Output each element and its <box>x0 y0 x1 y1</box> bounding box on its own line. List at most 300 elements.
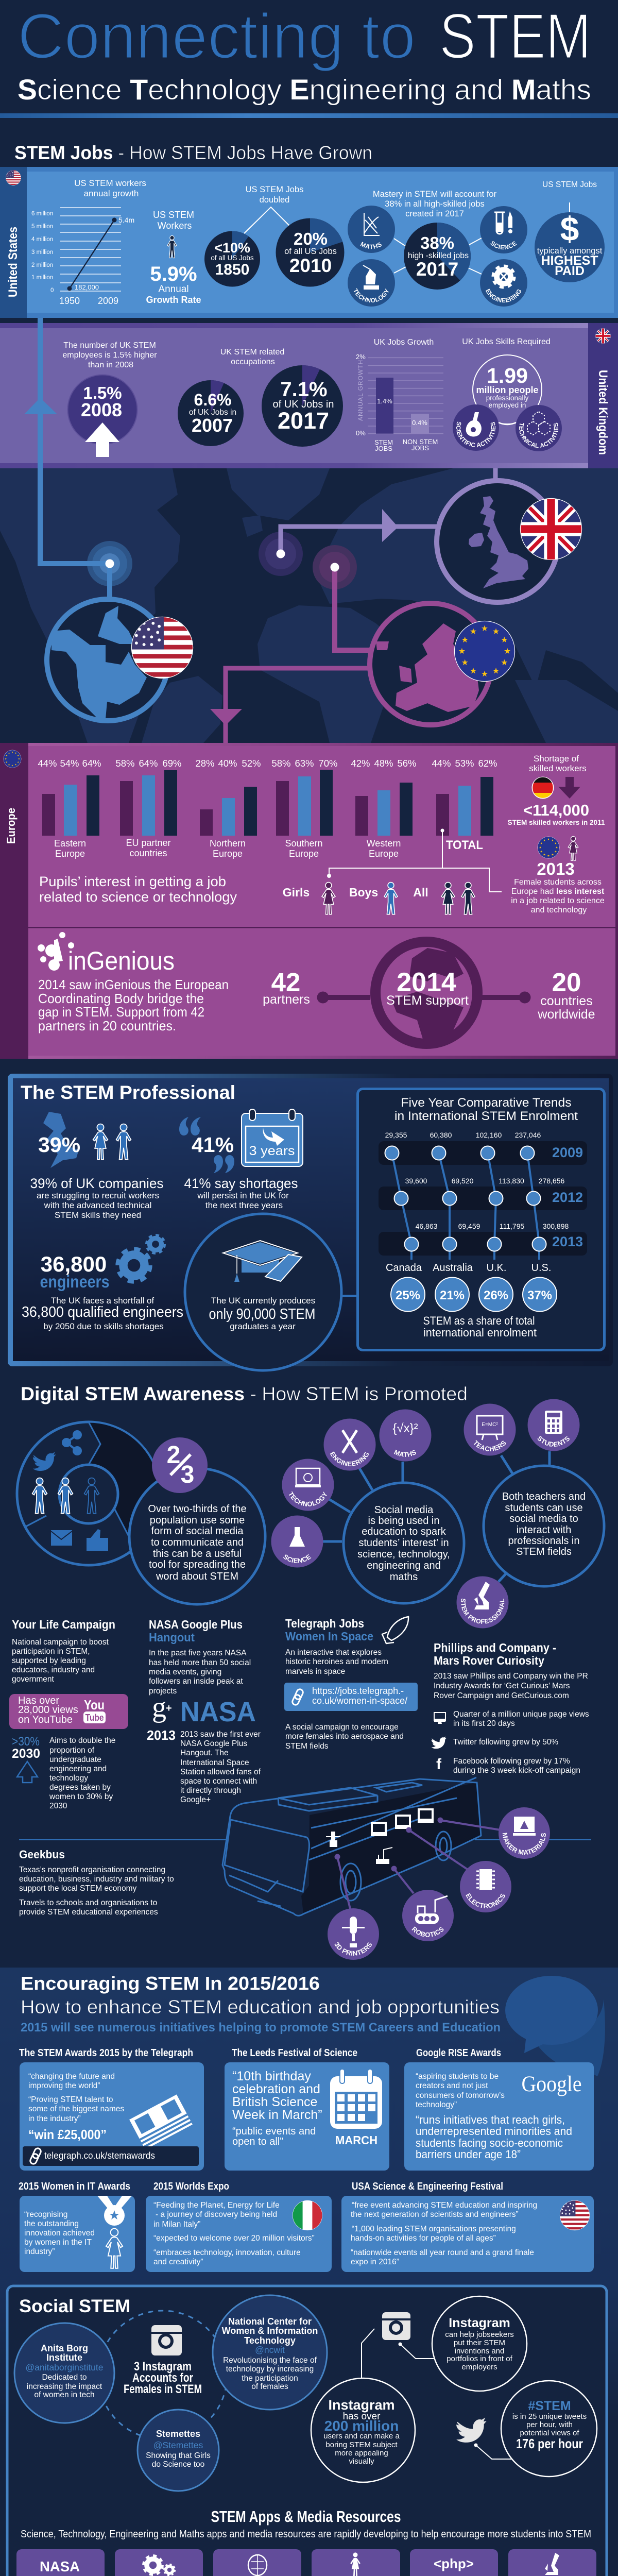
icon: engineering <box>480 259 527 307</box>
tagline: 2015 will see numerous initiatives helping to promote STEM Careers and Education <box>21 2021 501 2035</box>
bar chart: pupils' interest by region: Europe <box>55 849 85 859</box>
bubble: NCWIT: of females <box>251 2382 288 2391</box>
icon: US flag <box>560 2200 590 2230</box>
block: Phillips and Company: Twitter following grew by 50% <box>453 1738 558 1747</box>
stat: 90,000 STEM graduates: The UK currently produces <box>211 1296 315 1306</box>
bar chart: pupils' interest by region: TOTAL <box>446 838 483 852</box>
bar chart: pupils' interest by region: 63% <box>295 758 314 769</box>
block: Your Life Campaign <box>9 1618 128 1810</box>
card: STEM Awards: “win £25,000” <box>28 2127 107 2142</box>
bar chart: pupils' interest by region: EU partner <box>126 838 171 848</box>
stat: 36,800 engineers: by 2050 due to skills shortages <box>43 1321 164 1331</box>
card: USA Science & Engineering Festival <box>341 2181 594 2272</box>
block: Telegraph Jobs Women in Space: Women In Space <box>285 1630 373 1643</box>
stat: US STEM workers 5.9%: Growth Rate <box>146 295 201 305</box>
bar chart: pupils' interest by region: 40% <box>218 758 237 769</box>
pie: 38% high-skilled jobs 2017: 2017 <box>416 259 458 280</box>
icon: STEM professional: STEM PROFESSIONAL <box>461 1598 505 1624</box>
link box <box>284 1683 418 1711</box>
diagram: social media in education <box>271 1410 464 1603</box>
bar chart: pupils' interest by region: 64% <box>139 758 158 769</box>
card: Google RISE Awards: consumers of tomorrow’s <box>416 2091 505 2100</box>
stat: 90,000 STEM graduates: only 90,000 STEM <box>209 1306 315 1323</box>
diagram: Instagram accounts for females: 3 Instagram <box>134 2360 192 2374</box>
stat: 36,800 engineers <box>22 1235 183 1331</box>
card: Design Squad Nation <box>115 2549 203 2576</box>
chart: international enrolment trends: 37% <box>527 1289 552 1302</box>
block: Geekbus text: support the local STEM economy <box>19 1884 137 1893</box>
card: Google RISE Awards: creators and not just <box>416 2081 488 2090</box>
badge: two thirds <box>152 1437 208 1493</box>
block: Phillips and Company: in its first 20 days <box>453 1719 515 1728</box>
card: Leeds Festival of Science: “10th birthday <box>232 2069 311 2083</box>
card: STEM Awards: “changing the future and <box>28 2072 115 2081</box>
card: USA Science & Engineering Festival: “nationwide events all year round and a grand finale <box>351 2248 534 2257</box>
pies: UK STEM related occupations: 2017 <box>278 408 329 434</box>
icon: teachers: TEACHERS <box>474 1440 506 1451</box>
line chart: US STEM workers annual growth <box>31 178 146 306</box>
bubble: jobseekers: portfolios in front of <box>447 2354 513 2363</box>
card: USA Science & Engineering Festival: hands-on activities for people of all ages” <box>351 2234 496 2243</box>
icon: STEM professional <box>456 1577 509 1628</box>
stat: 1.5% 2008 <box>62 341 157 457</box>
icon: thumbs up <box>87 1529 108 1551</box>
bar chart: pupils' interest by region: 69% <box>162 758 182 769</box>
stat: 30% by 2030: undergraduate <box>49 1755 101 1764</box>
icon: US flag small <box>6 170 21 185</box>
icon: maker materials: MAKER MATERIALS <box>503 1833 546 1855</box>
text: inGenious description: Coordinating Body bridge the <box>38 991 204 1006</box>
block: NASA Google Plus Hangout: 2013 <box>147 1727 176 1743</box>
card: Women in IT Awards: “recognising <box>24 2210 67 2219</box>
line chart: US STEM workers annual growth: 2 million <box>31 262 53 268</box>
icon: teachers: E=MC² <box>482 1422 498 1428</box>
diagram: 2014 STEM support globe: worldwide <box>537 1007 595 1022</box>
card: STEM Awards <box>19 2047 204 2171</box>
bubble: Anita Borg Institute: Institute <box>46 2352 82 2363</box>
block: Geekbus text: provide STEM educational experiences <box>19 1908 158 1917</box>
stat: 41% say shortages: 41% <box>192 1133 234 1157</box>
stat: 1.5% 2008: than in 2008 <box>88 361 133 369</box>
bar chart: pupils' interest by region: 70% <box>318 758 338 769</box>
card: Worlds Expo: “Feeding the Planet, Energy for Life <box>153 2201 280 2210</box>
callout: two thirds text: form of social media <box>151 1526 244 1537</box>
stat: highest paid: HIGHEST <box>541 253 598 268</box>
connector: UK marker <box>259 468 495 576</box>
icon: UK flag small <box>595 328 611 344</box>
block: NASA Google Plus Hangout: NASA Google Plus <box>180 1739 247 1748</box>
callout: two thirds text: tool for spreading the <box>149 1559 246 1570</box>
diagram: UK jobs skills required: million people <box>476 385 539 395</box>
link bar: telegraph.co.uk/stemawards <box>44 2150 155 2161</box>
text: inGenious description: partners in 20 countries. <box>38 1018 176 1033</box>
stat: highest paid: $ <box>560 210 579 248</box>
block: Phillips and Company: during the 3 week kick-off campaign <box>453 1766 580 1775</box>
icon: envelope <box>51 1530 72 1546</box>
diagram: 2014 STEM support globe: STEM support <box>386 993 469 1008</box>
card: STEM Awards: some of the biggest names <box>28 2105 124 2113</box>
callout: YouTube views: Has over <box>18 1695 59 1706</box>
block: Phillips and Company: 2013 saw Phillips and Company win the PR <box>434 1672 588 1681</box>
heading: Digital STEM Awareness: Digital STEM Awareness - How STEM is Promoted <box>21 1383 468 1404</box>
pies: UK STEM related occupations: UK STEM related <box>220 348 284 357</box>
bubble: Anita Borg Institute <box>14 2323 114 2423</box>
heading: STEM Jobs: STEM Jobs - How STEM Jobs Have Grown <box>14 142 372 163</box>
diagram: Instagram accounts for females <box>14 2295 327 2491</box>
text: inGenious description <box>38 977 229 1033</box>
icon: maths: MATHS <box>393 1450 416 1457</box>
icon: technical activities <box>516 405 562 451</box>
bubble: 200 million: users and can make a <box>323 2432 400 2441</box>
block: NASA Google Plus Hangout: space to connect with <box>180 1777 257 1786</box>
chart: international enrolment trends: 111,795 <box>500 1222 524 1230</box>
card: Women in IT Awards: 2015 Women in IT Awards <box>19 2181 130 2192</box>
icon: science: SCIENCE <box>283 1554 311 1563</box>
bar chart: pupils' interest by region: Europe <box>369 849 399 859</box>
bar chart: UK jobs growth: 0.4% <box>412 419 427 427</box>
label: Europe: Europe <box>5 808 18 844</box>
heading: STEM Apps and Media Resources: STEM Apps & Media Resources <box>211 2507 401 2526</box>
block: Your Life Campaign: participation in STEM, <box>12 1647 90 1656</box>
bubble: jobseekers <box>432 2296 527 2391</box>
chart: international enrolment trends: STEM as a share of total <box>423 1314 535 1327</box>
card: Google RISE Awards: underrepresented minorities and <box>416 2125 572 2138</box>
block: Telegraph Jobs Women in Space: historic heroines and modern <box>285 1657 388 1666</box>
bar chart: pupils' interest by region: countries <box>129 848 167 858</box>
badge: two thirds: 2 <box>167 1442 180 1469</box>
stat: 39% of UK companies <box>30 1112 164 1220</box>
stat: 36,800 engineers: 36,800 <box>41 1252 107 1276</box>
block: Your Life Campaign: educators, industry and <box>12 1666 95 1674</box>
chart: international enrolment trends: international enrolment <box>423 1326 537 1339</box>
block: NASA Google Plus Hangout: it directly through <box>180 1786 241 1795</box>
bubble: NCWIT: the participation <box>242 2374 298 2383</box>
stat: 90,000 STEM graduates: graduates a year <box>230 1321 296 1331</box>
stat: 1.5% 2008: 1.5% <box>83 383 122 402</box>
line chart: US STEM workers annual growth: 182,000 <box>75 283 99 291</box>
stat: highest paid: typically amongst <box>537 246 603 256</box>
link bar <box>23 2146 199 2166</box>
chart: international enrolment trends: 26% <box>484 1289 508 1302</box>
bubble: jobseekers: Instagram <box>449 2316 510 2330</box>
bubble: Anita Borg Institute: @anitaborginstitute <box>25 2362 104 2372</box>
block: Geekbus text <box>19 1848 174 1917</box>
stat: 30% by 2030: 2030 <box>12 1747 40 1761</box>
text: pupils' interest: related to science or technology <box>39 889 237 905</box>
bar chart: pupils' interest by region: 42% <box>351 758 370 769</box>
callout: YouTube views: Tube <box>85 1713 104 1723</box>
stat: female students 2013: 2013 <box>537 859 575 878</box>
bar chart: pupils' interest by region: 64% <box>82 758 101 769</box>
diagram: Instagram facts <box>311 2296 527 2482</box>
block: Telegraph Jobs Women in Space: STEM fields <box>285 1742 329 1751</box>
card: USA Science & Engineering Festival: USA Science & Engineering Festival <box>352 2181 503 2192</box>
icon: students <box>527 1399 580 1451</box>
icon: March calendar <box>330 2069 382 2147</box>
icon: share <box>62 1430 82 1455</box>
card: USA Science & Engineering Festival: “free event advancing STEM education and inspiring <box>352 2201 537 2210</box>
icon: maths <box>379 1410 432 1461</box>
block: Geekbus text: Geekbus <box>19 1848 65 1861</box>
bar chart: pupils' interest by region: 58% <box>115 758 135 769</box>
bar chart: pupils' interest by region: Europe <box>289 849 319 859</box>
text: pupils' interest <box>39 874 237 905</box>
bar chart: pupils' interest by region: 54% <box>60 758 79 769</box>
card: NASA App <box>16 2549 105 2576</box>
bar chart: pupils' interest by region: Eastern <box>54 838 86 849</box>
bubble: Anita Borg Institute: of women in tech <box>34 2391 95 2399</box>
icon: technical activities: TECHNICAL ACTIVITIES <box>519 422 558 448</box>
bubble: 200 million: has over <box>343 2411 381 2422</box>
logo: inGenious: inGenious <box>68 946 175 975</box>
chart: US STEM jobs doubled pies: 2010 <box>289 255 332 276</box>
card: Leeds Festival of Science: British Science <box>232 2095 317 2109</box>
stat: 41% say shortages <box>179 1109 303 1210</box>
bubble: Stemettes: Showing that Girls <box>146 2451 211 2460</box>
bubble: Stemettes <box>138 2410 219 2491</box>
stat: female students 2013: in a job related to science <box>511 896 605 905</box>
legend: girls boys all: All <box>413 886 428 899</box>
card: Worlds Expo: “expected to welcome over 20 million visitors” <box>153 2234 315 2243</box>
badge: two thirds: 3 <box>181 1461 194 1488</box>
diagram: #STEM twitter: #STEM <box>528 2399 571 2413</box>
chart: international enrolment trends: 21% <box>440 1289 465 1302</box>
bar chart: pupils' interest by region: 52% <box>242 758 261 769</box>
block: NASA Google Plus Hangout: 2013 saw the first ever <box>180 1730 261 1739</box>
icon: UK flag large <box>520 498 582 560</box>
chart: international enrolment trends: 69,459 <box>458 1222 480 1230</box>
diagram: UK jobs skills required: professionally <box>486 394 529 402</box>
chart: international enrolment trends: U.K. <box>487 1262 506 1274</box>
diagram: #STEM twitter <box>456 2381 597 2477</box>
bubble: jobseekers: employers <box>461 2363 497 2371</box>
callout: YouTube views: on YouTube <box>18 1714 73 1725</box>
bubble: NCWIT: Revolutionising the face of <box>223 2356 317 2365</box>
bar chart: pupils' interest by region: 48% <box>374 758 393 769</box>
icon: technology: TECHNOLOGY <box>288 1491 327 1506</box>
chart: US STEM jobs doubled pies: 1850 <box>215 261 249 278</box>
diagram: social media population <box>17 1422 265 1604</box>
pies: UK STEM related occupations <box>178 348 343 447</box>
card: STEM Awards: improving the world” <box>28 2081 100 2090</box>
icon: graduate cap <box>223 1241 302 1282</box>
stat: female students 2013: Female students across <box>514 878 602 887</box>
stat: highest paid: US STEM Jobs <box>542 180 597 189</box>
icon: electronics: ELECTRONICS <box>466 1893 505 1908</box>
diagram: mastery in STEM <box>348 190 527 307</box>
block: Telegraph Jobs Women in Space <box>284 1617 418 1751</box>
bar chart: pupils' interest by region: 62% <box>478 758 497 769</box>
subtitle: Science Technology Engineering and Maths <box>18 73 591 106</box>
bar chart: UK jobs growth <box>356 338 443 452</box>
chart: international enrolment trends: 300,898 <box>543 1222 569 1230</box>
diagram: teachers and students <box>456 1399 604 1628</box>
chart: international enrolment trends: 2013 <box>552 1234 583 1249</box>
card: USA Science & Engineering Festival: expo in 2016” <box>351 2258 399 2266</box>
icon: scientific activities <box>453 404 499 451</box>
people group <box>32 1478 99 1514</box>
chart: international enrolment trends: Australia <box>433 1262 473 1274</box>
stat: highest paid: PAID <box>555 264 585 278</box>
icon: medal <box>97 2196 132 2226</box>
block: NASA Google Plus Hangout: International Space <box>180 1758 249 1767</box>
icon: maths: MATHS <box>360 242 382 249</box>
diagram: teachers and students: professionals in <box>508 1535 579 1547</box>
panel: The STEM Professional <box>8 1074 613 1370</box>
stat: 30% by 2030: >30% <box>12 1735 40 1749</box>
stat: female students 2013: and technology <box>531 906 587 914</box>
diagram: mastery in STEM: Mastery in STEM will account for <box>373 190 497 199</box>
line chart: US STEM workers annual growth: 5 million <box>31 224 53 230</box>
bar chart: UK jobs growth: ANNUAL GROWTH <box>357 360 364 421</box>
icon: students: STUDENTS <box>538 1436 570 1447</box>
logo: inGenious <box>38 932 175 975</box>
line chart: US STEM workers annual growth: 0 <box>50 287 54 294</box>
chart: international enrolment trends: 2012 <box>552 1190 583 1205</box>
bar chart: pupils' interest by region: 58% <box>271 758 291 769</box>
diagram: UK jobs skills required: employed in <box>489 401 526 409</box>
callout: two thirds text: population use some <box>150 1515 245 1526</box>
stat: shortage of skilled workers <box>508 754 605 826</box>
icon: EU flag large <box>454 621 515 682</box>
stat: shortage of skilled workers: skilled workers <box>529 764 587 773</box>
bar chart: UK jobs growth: JOBS <box>375 445 392 452</box>
bar chart: UK jobs growth: STEM <box>374 438 393 446</box>
diagram: 2014 STEM support globe: partners <box>263 992 310 1007</box>
icon: robotics: ROBOTICS <box>411 1926 444 1937</box>
diagram: UK jobs skills required <box>453 337 562 451</box>
stat: 39% of UK companies: 39% <box>38 1133 80 1157</box>
diagram: 2014 STEM support globe: 20 <box>552 968 581 997</box>
icon: science <box>480 206 527 253</box>
line chart: US STEM workers annual growth: US STEM workers <box>74 178 146 188</box>
block: NASA Google Plus Hangout: projects <box>149 1687 177 1696</box>
logo: g+ and NASA: g <box>152 1691 166 1723</box>
chart: US STEM jobs doubled pies: doubled <box>260 195 289 205</box>
card: Google RISE Awards <box>404 2047 594 2171</box>
panel: Europe <box>0 743 618 1059</box>
block: Phillips and Company: Mars Rover Curiosity <box>434 1654 544 1667</box>
chart: international enrolment trends: U.S. <box>531 1262 551 1274</box>
block: Telegraph Jobs Women in Space: more females into aerospace and <box>285 1732 404 1741</box>
block: NASA Google Plus Hangout <box>147 1618 261 1804</box>
line chart: US STEM workers annual growth: 3 million <box>31 249 53 256</box>
heading: Encouraging STEM In 2015/2016 <box>21 1973 320 1994</box>
diagram: 2014 STEM support globe: 42 <box>271 968 300 997</box>
block: Phillips and Company: Quarter of a million unique page views <box>453 1710 589 1719</box>
bubble: Stemettes: @Stemettes <box>153 2440 203 2450</box>
callout: YouTube views <box>9 1694 128 1729</box>
card: Leeds Festival of Science: celebration and <box>232 2082 320 2096</box>
stat: 41% say shortages: 41% say shortages <box>184 1176 298 1191</box>
bubble: NCWIT: Women & Information <box>222 2326 318 2336</box>
card: NASA App: NASA <box>40 2558 80 2574</box>
diagram: #STEM twitter: 176 per hour <box>516 2436 583 2451</box>
card: Leeds Festival of Science <box>225 2047 389 2171</box>
panel: United Kingdom <box>0 323 618 468</box>
section: Encouraging STEM <box>0 1968 618 2421</box>
stat: 36,800 engineers: The UK faces a shortfall of <box>51 1296 154 1306</box>
block: NASA Google Plus Hangout: NASA Google Plus <box>149 1618 243 1631</box>
bar chart: UK jobs growth: NON STEM <box>403 438 438 446</box>
line chart: US STEM workers annual growth: 1950 <box>59 296 80 306</box>
icon: maths <box>348 206 395 253</box>
bar chart: pupils' interest by region: 28% <box>195 758 215 769</box>
bubble: Anita Borg Institute: Dedicated to <box>42 2373 87 2382</box>
title: Connecting to <box>18 1 416 72</box>
stat: 39% of UK companies: with the advanced technical <box>44 1200 151 1210</box>
stat: 39% of UK companies: are struggling to recruit workers <box>37 1191 159 1200</box>
card: The Big Brain Theory <box>213 2549 301 2576</box>
card: Worlds Expo: 2015 Worlds Expo <box>153 2181 229 2192</box>
label: United States: United States <box>6 227 20 297</box>
diagram: Instagram accounts for females: Females in STEM <box>124 2382 202 2396</box>
diagram: mastery in STEM: 38% in all high-skilled jobs <box>385 199 485 209</box>
card: Google RISE Awards: “runs initiatives that reach girls, <box>416 2113 565 2126</box>
stat: shortage of skilled workers: STEM skilled workers in 2011 <box>508 818 605 826</box>
line chart: US STEM workers annual growth: 6 million <box>31 211 53 217</box>
panel: United States <box>0 167 618 318</box>
chart: international enrolment trends: 25% <box>396 1289 420 1302</box>
chart: international enrolment trends: 69,520 <box>452 1177 474 1185</box>
bubble: NCWIT <box>213 2295 327 2410</box>
bar chart: pupils' interest by region: Northern <box>210 838 246 849</box>
block: Phillips and Company: Facebook following grew by 17% <box>453 1757 570 1766</box>
bubble: NCWIT: Technology <box>244 2335 296 2346</box>
bubble: NCWIT: @ncwit <box>255 2345 285 2355</box>
stat: shortage of skilled workers: Shortage of <box>534 754 579 764</box>
logo: g+ and NASA <box>152 1691 256 1727</box>
logo: g+ and NASA: NASA <box>180 1697 256 1727</box>
diagram: social media in education: is being used in <box>368 1515 439 1527</box>
icon: speech bubbles <box>505 1976 605 2076</box>
stat: 30% by 2030: degrees taken by <box>49 1783 111 1792</box>
bar chart: pupils' interest by region: Southern <box>285 838 323 849</box>
icon: teachers <box>464 1403 516 1456</box>
legend: girls boys all: Boys <box>349 886 378 899</box>
card: Google RISE Awards: students facing socio-economic <box>416 2137 563 2149</box>
icon: engineering <box>323 1419 376 1470</box>
pies: UK STEM related occupations: of UK Jobs in <box>273 399 334 410</box>
legend: girls boys all: Girls <box>283 886 310 899</box>
card: STEM Awards: The STEM Awards 2015 by the Telegraph <box>19 2047 193 2059</box>
bar chart: pupils' interest by region <box>38 758 497 859</box>
diagram: social media in education: education to spark <box>362 1526 447 1537</box>
icon: facebook: f <box>436 1756 442 1773</box>
card: Women in IT Awards: by women in the IT <box>24 2238 92 2247</box>
stat: 30% by 2030: engineering and <box>49 1765 107 1773</box>
bubble: jobseekers: put their STEM <box>454 2338 505 2347</box>
icon: rocket <box>382 1617 408 1643</box>
card: Leeds Festival of Science: Week in March” <box>232 2108 322 2122</box>
diagram: UK jobs skills required: UK Jobs Skills Required <box>462 337 551 346</box>
callout: two thirds text <box>129 1468 265 1604</box>
bar chart: UK jobs growth: 0% <box>356 429 366 437</box>
pies: UK STEM related occupations: of UK Jobs in <box>189 408 236 417</box>
callout: two thirds text: word about STEM <box>156 1571 238 1582</box>
label: United Kingdom: United Kingdom <box>596 370 610 455</box>
diagram: teachers and students: interact with <box>517 1524 571 1536</box>
diagram: 2014 STEM support globe <box>263 942 595 1046</box>
icon: technology <box>282 1459 334 1511</box>
block: Your Life Campaign: Your Life Campaign <box>12 1618 115 1631</box>
icon: March calendar: MARCH <box>335 2133 377 2147</box>
block: Geekbus text: Texas’s nonprofit organisation connecting <box>19 1866 165 1874</box>
chart: US STEM jobs doubled pies: of all US Jobs <box>284 247 337 256</box>
bubble: 200 million: boring STEM subject <box>325 2441 398 2449</box>
pies: UK STEM related occupations: 7.1% <box>280 378 328 401</box>
stat: 1.5% 2008: The number of UK STEM <box>63 341 156 350</box>
